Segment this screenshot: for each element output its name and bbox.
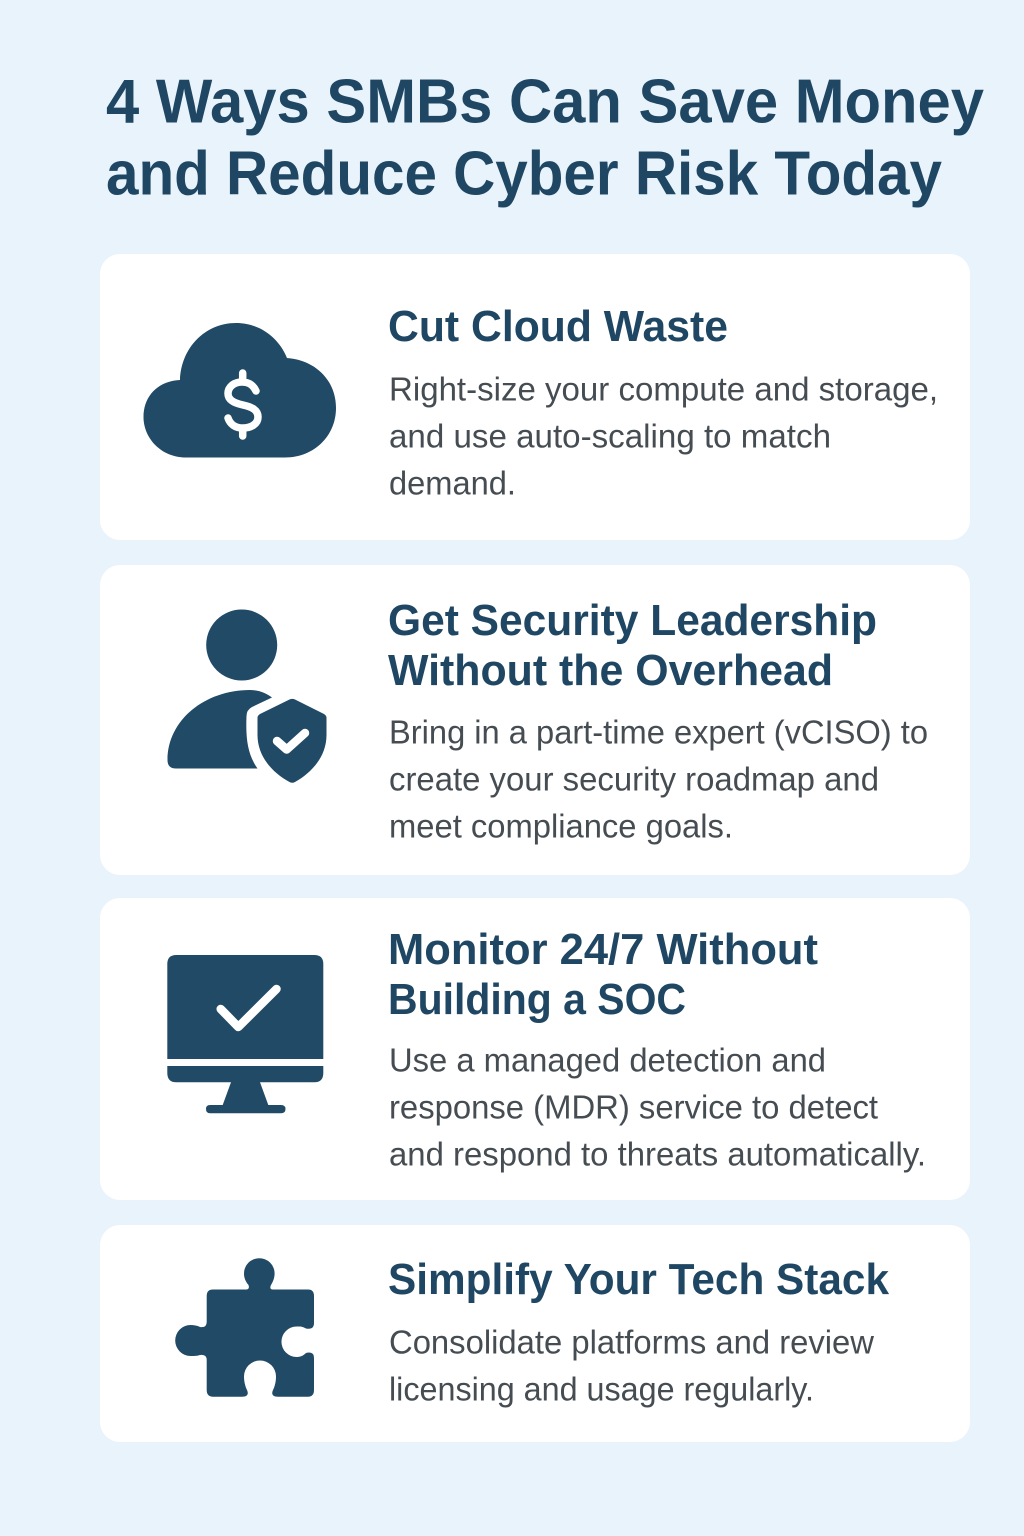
heading: cut cloud waste: Cut Cloud Waste (388, 303, 728, 351)
panel: monitor 24/7 (100, 898, 970, 1200)
heading: monitor 24/7 (388, 926, 818, 1024)
panel: cut cloud waste (100, 254, 970, 540)
text: monitor description: Use a managed detection and (389, 1042, 826, 1078)
text: cut cloud waste description: and use auto-scaling to match (389, 418, 831, 454)
heading: simplify tech stack: Simplify Your Tech Stack (388, 1256, 890, 1304)
text: monitor description: response (MDR) service to detect (389, 1088, 878, 1126)
heading: security leadership: Get Security Leadership (388, 597, 877, 645)
heading: monitor 24/7: Building a SOC (388, 976, 686, 1024)
text: security leadership description (389, 714, 928, 844)
title: and Reduce Cyber Risk Today (106, 140, 942, 208)
title: 4 Ways SMBs Can Save Money (106, 68, 984, 136)
text: cut cloud waste description: demand. (389, 464, 516, 502)
heading: security leadership: Without the Overhead (388, 647, 833, 695)
text: cut cloud waste description (389, 370, 938, 502)
text: monitor description (389, 1042, 926, 1172)
panel: simplify tech stack (100, 1225, 970, 1442)
text: security leadership description: meet compliance goals. (389, 808, 733, 844)
text: security leadership description: Bring in a part-time expert (vCISO) to (389, 714, 928, 750)
text: cut cloud waste description: Right-size your compute and storage, (389, 370, 938, 408)
panel: security leadership (100, 565, 970, 875)
icon: cloud with dollar sign (144, 323, 336, 458)
icon: monitor with check (167, 955, 323, 1113)
text: monitor description: and respond to threats automatically. (389, 1136, 926, 1172)
text: security leadership description: create your security roadmap and (389, 760, 879, 798)
title (106, 68, 984, 208)
icon: person with shield (168, 610, 326, 783)
icon: puzzle piece (175, 1258, 314, 1397)
text: simplify description: licensing and usage regularly. (389, 1370, 814, 1408)
heading: monitor 24/7: Monitor 24/7 Without (388, 926, 818, 974)
text: simplify description (389, 1324, 874, 1408)
heading: security leadership (388, 597, 877, 695)
text: simplify description: Consolidate platforms and review (389, 1324, 874, 1360)
